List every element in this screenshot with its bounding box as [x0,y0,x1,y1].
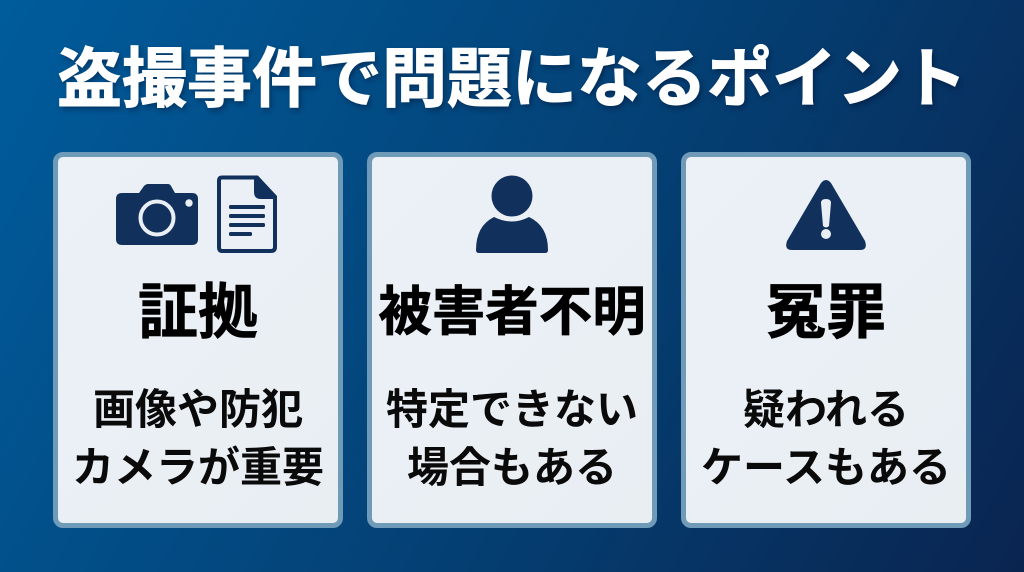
description: false accusation [701,386,951,491]
panel: unknown victim [367,152,657,528]
description: evidence: カメラが重要 [72,444,324,491]
title: 盗撮事件で問題になるポイント [57,42,967,115]
description: unknown victim: 場合もある [407,444,617,491]
icons: camera and document [116,176,277,253]
description: false accusation: ケースもある [701,444,951,491]
description: false accusation: 疑われる [743,386,909,433]
description: unknown victim: 特定できない [386,386,638,433]
description: evidence: 画像や防犯 [93,386,303,433]
panel: evidence [53,152,343,528]
heading: false accusation: 冤罪 [766,279,886,346]
description: evidence [72,386,324,491]
heading: evidence: 証拠 [138,279,258,346]
description: unknown victim [386,386,638,491]
icon: warning triangle [786,180,866,250]
panel: false accusation [681,152,971,528]
icon: person [476,176,548,253]
heading: unknown victim: 被害者不明 [378,283,646,342]
